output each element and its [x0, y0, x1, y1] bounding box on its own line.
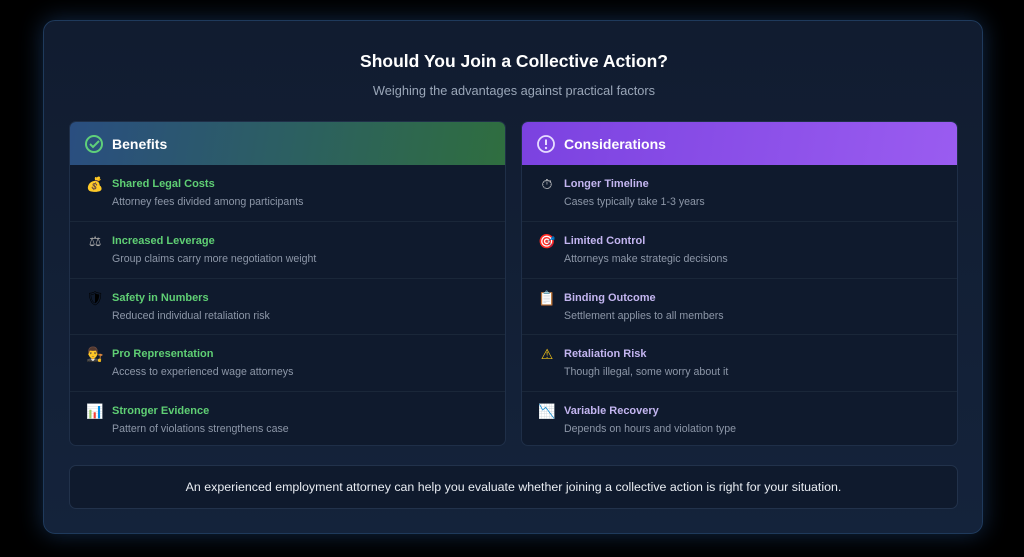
item: limited control: 🎯: [538, 233, 556, 249]
item: shared legal costs: Shared Legal Costs: [112, 178, 215, 190]
subtitle: Weighing the advantages against practical factors: [373, 83, 655, 98]
item: safety: Reduced individual retaliation risk: [112, 310, 270, 322]
considerations header: [522, 122, 957, 165]
item: safety: 🛡: [86, 290, 104, 306]
item: stronger evidence: 📊: [86, 403, 104, 419]
benefits header: [70, 122, 505, 165]
item: retaliation risk: Retaliation Risk: [564, 348, 647, 360]
item: pro representation: [70, 334, 505, 391]
item: shared legal costs: [86, 176, 303, 208]
benefits header: Benefits: [112, 136, 167, 152]
item: limited control: Attorneys make strategic decisions: [564, 253, 728, 265]
item: variable recovery: Variable Recovery: [564, 405, 659, 417]
item: limited control: Limited Control: [564, 235, 645, 247]
item: shared legal costs: Attorney fees divided among participants: [112, 196, 303, 208]
item: pro representation: Pro Representation: [112, 348, 213, 360]
item: longer timeline: Cases typically take 1-3 years: [564, 196, 705, 208]
item: stronger evidence: Pattern of violations strengthens case: [112, 423, 289, 435]
item: increased leverage: [70, 221, 505, 278]
considerations header: Considerations: [564, 136, 666, 152]
item: variable recovery: Depends on hours and violation type: [564, 423, 736, 435]
item: binding outcome: 📋: [538, 290, 556, 306]
item: pro representation: 👨‍⚖️: [86, 346, 104, 362]
title: Should You Join a Collective Action?: [360, 51, 668, 71]
item: retaliation risk: [522, 334, 957, 391]
item: binding outcome: [522, 278, 957, 334]
item: increased leverage: ⚖: [89, 233, 101, 249]
item: longer timeline: ⏱: [542, 176, 552, 192]
item: longer timeline: Longer Timeline: [564, 178, 649, 190]
panel: benefits: [69, 121, 506, 446]
item: safety: Safety in Numbers: [112, 292, 209, 304]
item: safety: [70, 278, 505, 334]
item: binding outcome: Settlement applies to all members: [564, 310, 724, 322]
item: stronger evidence: [70, 391, 505, 447]
item: increased leverage: Increased Leverage: [112, 235, 215, 247]
panel: considerations: [521, 121, 958, 446]
item: retaliation risk: ⚠: [541, 346, 553, 362]
footer callout: An experienced employment attorney can help you evaluate whether joining a collective action is right for your situation.: [186, 480, 841, 494]
footer callout: [69, 465, 958, 509]
item: limited control: [522, 221, 957, 278]
item: variable recovery: [522, 391, 957, 447]
item: shared legal costs: 💰: [86, 176, 104, 192]
item: pro representation: Access to experienced wage attorneys: [112, 366, 293, 378]
item: variable recovery: 📉: [538, 403, 556, 419]
item: longer timeline: [542, 176, 705, 208]
item: stronger evidence: Stronger Evidence: [112, 405, 209, 417]
item: increased leverage: Group claims carry more negotiation weight: [112, 253, 316, 265]
item: retaliation risk: Though illegal, some worry about it: [564, 366, 728, 378]
item: binding outcome: Binding Outcome: [564, 292, 656, 304]
